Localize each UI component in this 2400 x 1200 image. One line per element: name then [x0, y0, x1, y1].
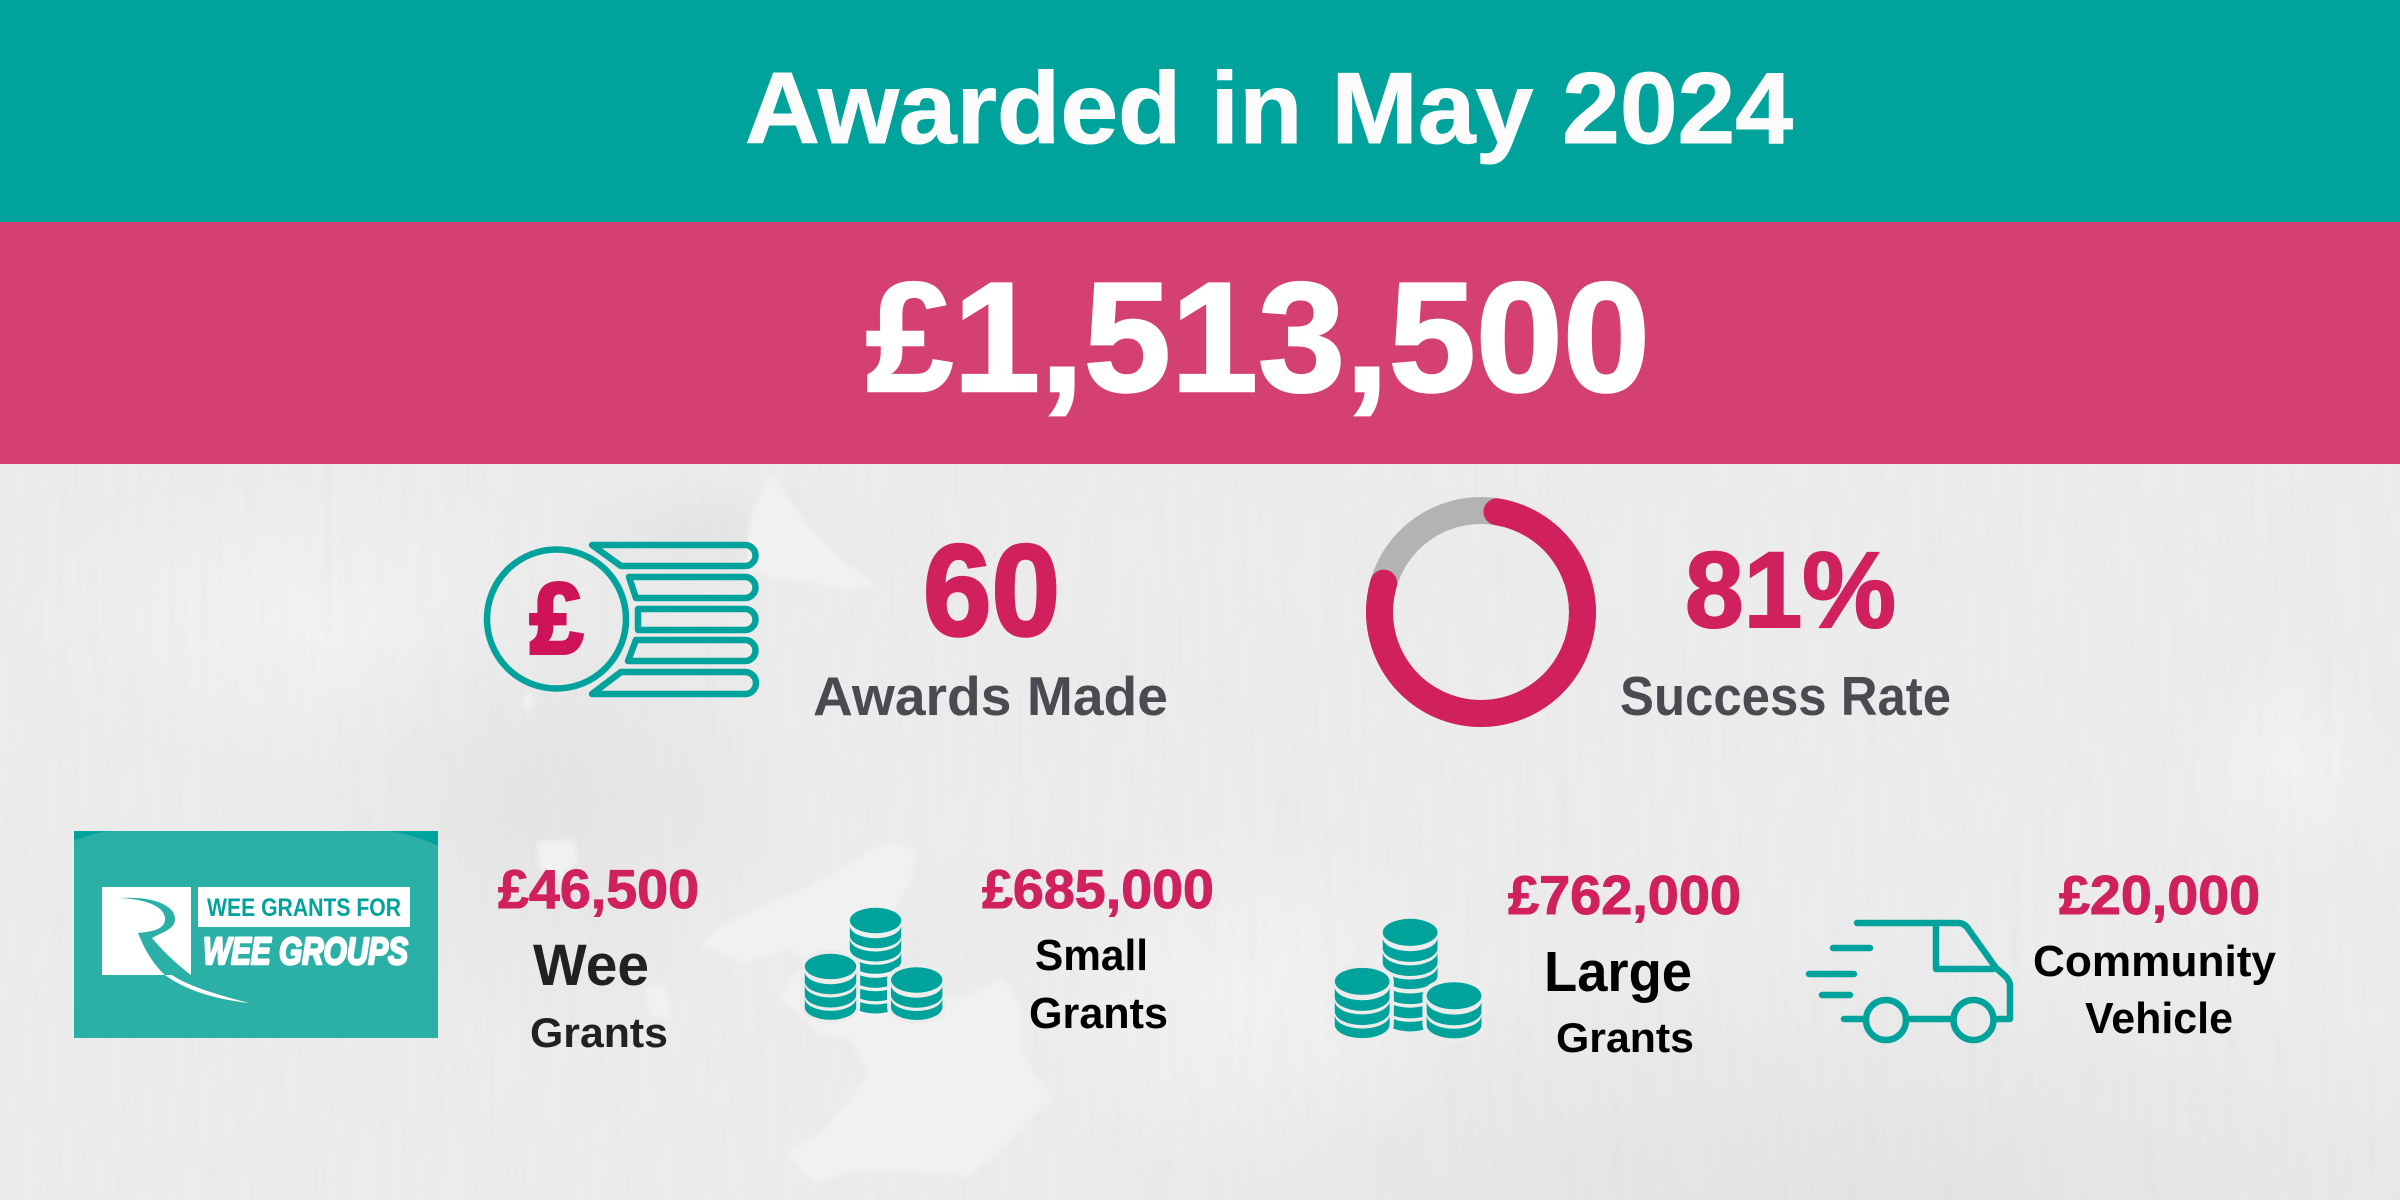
icon: delivery van — [1809, 923, 2010, 1040]
small sublabel: Grants — [1029, 989, 1168, 1038]
logo: wee grants for wee groups: WEE GRANTS FOR — [207, 894, 401, 922]
community vehicle block — [2033, 864, 2277, 1043]
icon: large grants coins — [1335, 919, 1481, 1038]
small label: Small — [1035, 931, 1148, 980]
teal title band — [0, 0, 2400, 222]
stat: awards made — [487, 517, 1168, 727]
wee label: Wee — [533, 933, 649, 998]
title: Awarded in May 2024 — [745, 53, 1793, 165]
large sublabel: Grants — [1556, 1014, 1694, 1061]
awards number: 60 — [923, 517, 1060, 663]
awards label: Awards Made — [813, 665, 1168, 727]
large grants block — [1508, 864, 1741, 1061]
small grants block — [982, 858, 1214, 1038]
wee grants block — [498, 858, 699, 1056]
vehicle amount: £20,000 — [2059, 864, 2260, 926]
logo: wee grants for wee groups: WEE GROUPS — [203, 931, 408, 973]
small amount: £685,000 — [982, 858, 1214, 920]
icon: pound coin stack: £ — [530, 563, 583, 675]
logo: wee grants for wee groups — [74, 831, 438, 1038]
total amount: £1,513,500 — [866, 251, 1650, 425]
vehicle label: Community — [2033, 937, 2277, 986]
icon: small grants coins — [805, 908, 942, 1020]
large amount: £762,000 — [1508, 864, 1741, 926]
vehicle sublabel: Vehicle — [2085, 994, 2233, 1043]
pink total band — [0, 222, 2400, 464]
icon: pound coin stack — [487, 545, 756, 694]
wee sublabel: Grants — [530, 1009, 668, 1056]
success label: Success Rate — [1620, 665, 1951, 727]
wee amount: £46,500 — [498, 858, 699, 920]
success number: 81% — [1685, 529, 1896, 650]
large label: Large — [1544, 940, 1692, 1004]
stat: success rate — [1379, 510, 1951, 727]
donut chart: 81% — [1379, 510, 1582, 714]
